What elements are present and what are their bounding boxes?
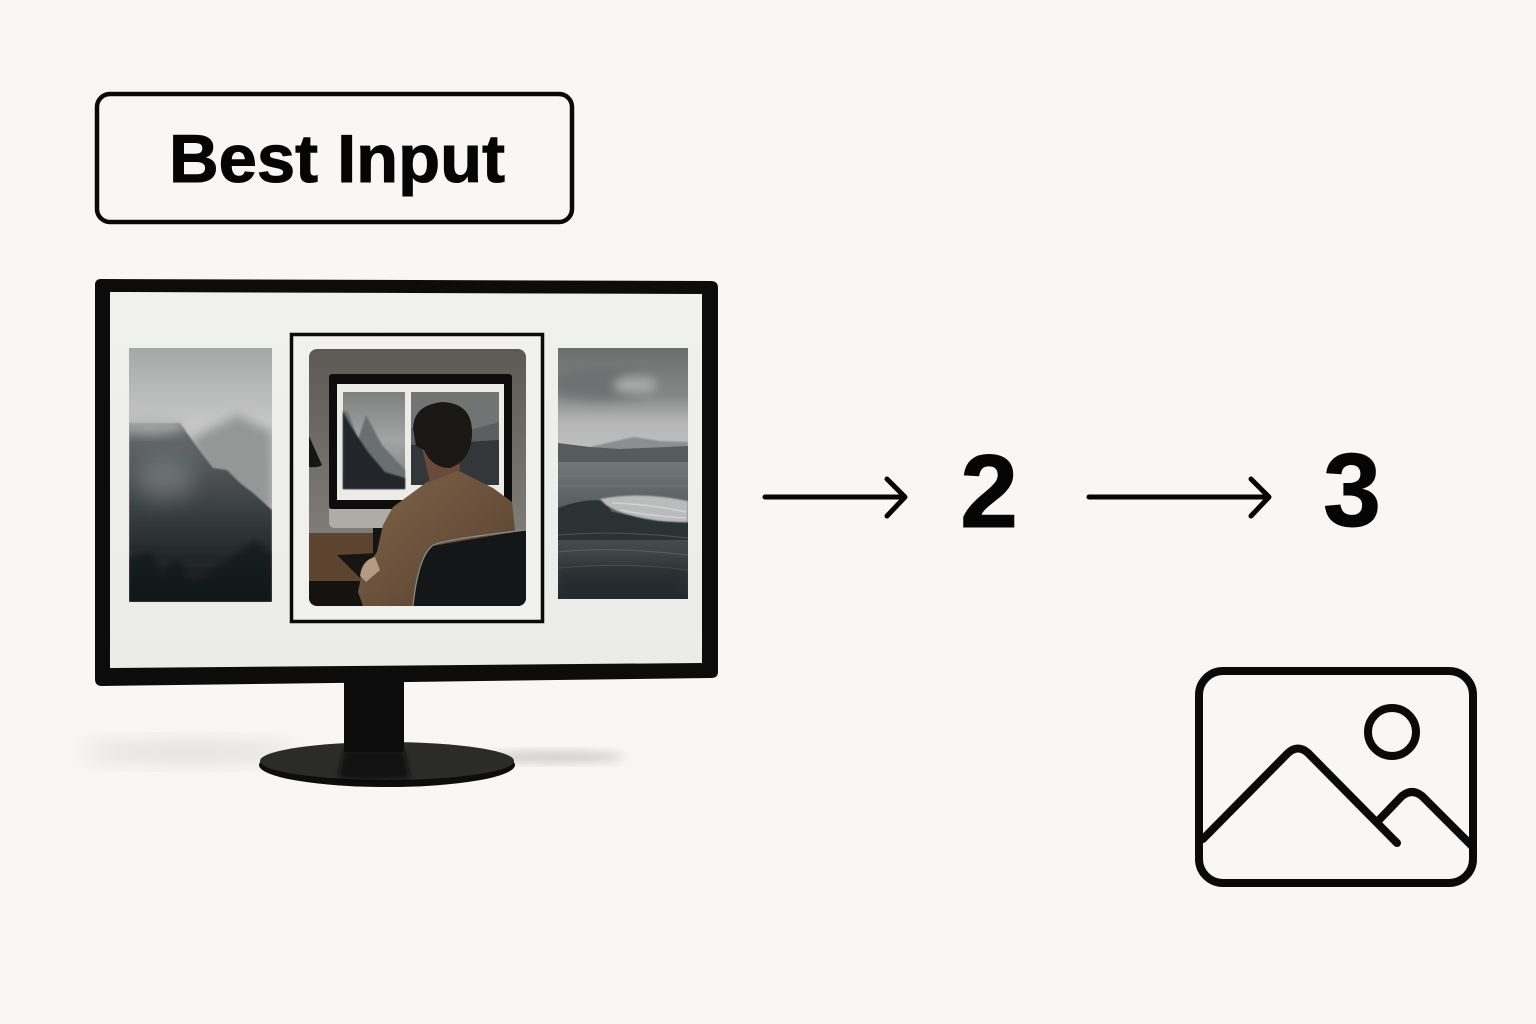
inner photo: mountain	[343, 392, 405, 489]
person neck	[422, 449, 460, 482]
monitor	[80, 279, 718, 787]
lamp	[309, 436, 322, 467]
desk	[309, 533, 373, 581]
inner monitor	[329, 374, 512, 509]
step number 2: 2	[960, 434, 1018, 550]
inner monitor base	[329, 509, 392, 528]
monitor shadow	[80, 743, 625, 763]
person hair	[413, 402, 472, 468]
monitor stand	[259, 680, 515, 787]
chair	[413, 530, 526, 606]
photo: stormy sea	[550, 348, 688, 599]
icon: image placeholder	[1199, 671, 1473, 883]
keyboard	[337, 553, 373, 578]
photo: misty mountain	[114, 348, 272, 602]
badge: Best Input	[97, 94, 572, 222]
monitor screen	[110, 292, 702, 668]
step number 3: 3	[1323, 433, 1381, 549]
photo: person at monitor	[309, 349, 526, 606]
person jacket	[358, 470, 520, 606]
selected frame	[292, 334, 542, 622]
arrow 2	[1089, 479, 1269, 516]
monitor bezel	[95, 279, 718, 686]
inner photo: hills	[411, 392, 499, 485]
person hand	[360, 557, 380, 582]
arrow 1	[765, 479, 905, 516]
badge: Best Input: Best Input	[169, 121, 505, 197]
